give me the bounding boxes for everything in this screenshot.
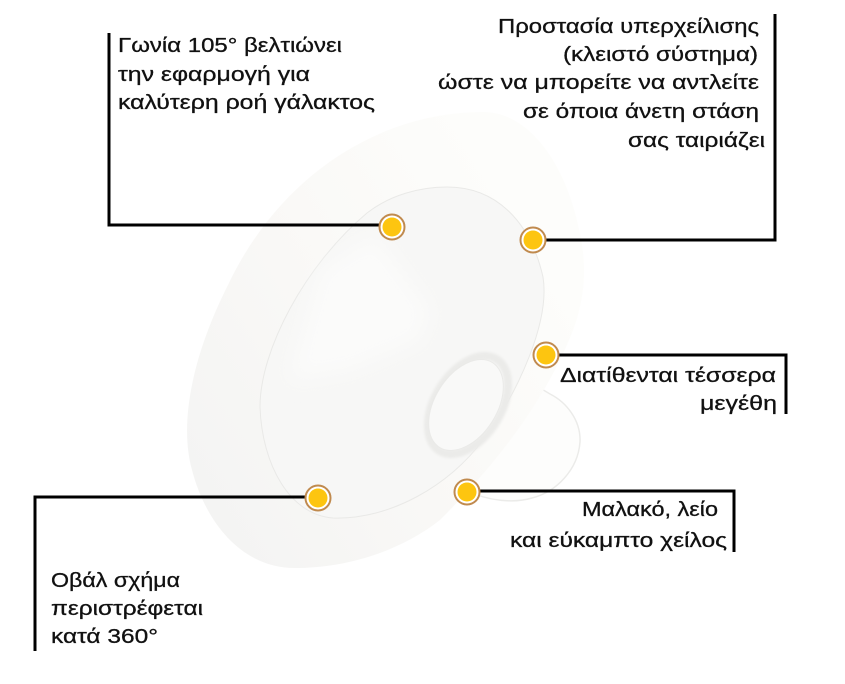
neck opening xyxy=(411,342,525,468)
callout text: καλύτερη ροή γάλακτος xyxy=(118,92,375,114)
callout text: περιστρέφεται xyxy=(51,598,203,620)
callout text xyxy=(51,570,203,648)
callout text xyxy=(560,365,777,415)
outer flange xyxy=(187,112,584,568)
callout text: κατά 360° xyxy=(51,626,158,648)
leader line xyxy=(479,491,734,552)
callout text: (κλειστό σύστημα) xyxy=(563,44,758,66)
callout text: την εφαρμογή για xyxy=(118,64,310,86)
callout text: Οβάλ σχήμα xyxy=(51,570,180,592)
callout text xyxy=(510,499,727,552)
product: breast shield funnel xyxy=(187,112,584,568)
marker xyxy=(534,342,558,368)
callout text: μεγέθη xyxy=(700,393,777,415)
leader line xyxy=(558,355,786,414)
callout text: σας ταιριάζει xyxy=(628,130,765,152)
marker xyxy=(454,480,480,504)
callout text: σε όποια άνετη στάση xyxy=(523,101,759,123)
leader line xyxy=(109,33,380,225)
callout text: Προστασία υπερχείλισης xyxy=(498,16,759,38)
callout: soft lip xyxy=(454,480,734,552)
callout text: Διατίθενται τέσσερα xyxy=(560,365,776,387)
callout text xyxy=(118,35,375,114)
callout text: ώστε να μπορείτε να αντλείτε xyxy=(438,72,759,94)
callout: 105 degree angle xyxy=(109,33,404,240)
callout text: και εύκαμπτο χείλος xyxy=(510,530,727,552)
callout: oval shape xyxy=(35,486,330,651)
leader line xyxy=(35,497,306,651)
inner cone xyxy=(260,187,544,518)
callout: overflow protection xyxy=(438,14,775,252)
callout text: Μαλακό, λείο xyxy=(582,499,718,521)
cone highlights xyxy=(290,235,430,380)
callout text xyxy=(438,16,765,152)
marker xyxy=(380,214,404,240)
marker xyxy=(520,228,546,252)
leader line xyxy=(545,14,775,240)
spout behind the flange xyxy=(465,382,580,501)
callout text: Γωνία 105° βελτιώνει xyxy=(118,35,342,57)
callout: four sizes xyxy=(534,342,786,415)
marker xyxy=(306,486,330,510)
